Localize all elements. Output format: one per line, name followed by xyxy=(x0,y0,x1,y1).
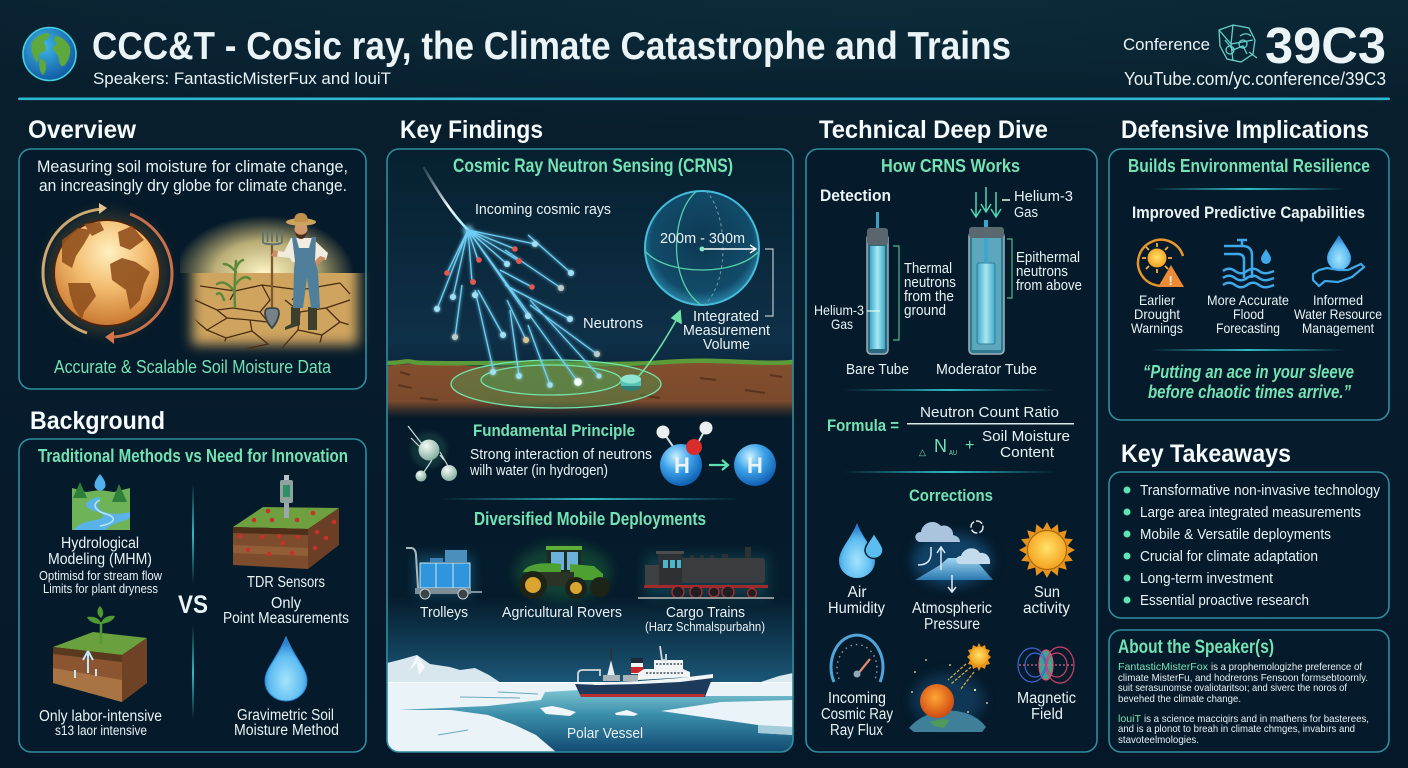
sphere: measurement volume xyxy=(645,191,773,316)
icon: neutron particles xyxy=(408,426,457,482)
bio: louiT: stavoteelmologies. xyxy=(1118,734,1199,746)
formula: N xyxy=(934,436,947,456)
icon: atmospheric pressure xyxy=(912,521,993,592)
subheading: predictive capabilities: Improved Predictive Capabilities xyxy=(1132,203,1365,222)
text: labor intensive xyxy=(39,708,162,738)
label: helium gas top: Gas xyxy=(1014,205,1038,221)
icon: humidity drops xyxy=(839,523,883,578)
label: measurement volume: Measurement xyxy=(683,323,770,339)
heading: Background: Background xyxy=(30,407,165,435)
label: helium gas top xyxy=(1014,189,1073,221)
label: epithermal neutrons xyxy=(1016,250,1082,294)
text: fundamental principle xyxy=(469,421,652,479)
bio: louiT xyxy=(1118,713,1369,746)
panel: background xyxy=(19,439,366,752)
icon: drought warning xyxy=(1138,240,1184,288)
arrow: sensor to volume xyxy=(638,311,681,377)
formula: Soil Moisture xyxy=(982,428,1070,445)
bio: FantasticMisterFox: climate MisterFu, and hodrerons Fensoon formsebtoornly. xyxy=(1118,672,1368,684)
icon: magnetic field xyxy=(1018,647,1074,683)
takeaway list: Essential proactive research xyxy=(1140,592,1309,609)
icon: incoming arrows xyxy=(971,187,1010,217)
takeaway list: Long-term investment xyxy=(1140,570,1274,587)
labels: predictive items: Informed xyxy=(1313,292,1363,308)
panel: key findings xyxy=(387,149,793,753)
diagram: moderator tube xyxy=(969,220,1012,354)
detection footprint ellipses xyxy=(451,360,661,408)
panel: defensive implications xyxy=(1109,149,1389,420)
text: TDR sensors: TDR Sensors xyxy=(247,574,325,591)
bio: FantasticMisterFox xyxy=(1118,661,1368,705)
deployment labels: Trolleys xyxy=(420,604,468,621)
label: polar vessel: Polar Vessel xyxy=(567,725,643,742)
bio: louiT: louiT xyxy=(1118,713,1142,725)
icon: water molecule to hydrogen: H xyxy=(747,453,763,478)
text: fundamental principle: wilh water (in hydrogen) xyxy=(469,463,608,479)
label: incoming flux: Incoming xyxy=(828,690,886,707)
polar scene xyxy=(387,655,793,753)
icon: water drop xyxy=(265,637,307,701)
deployment labels xyxy=(420,604,765,634)
bio: FantasticMisterFox: suit serasunomse ovaliotaritsoı; and siverc the noros of xyxy=(1118,682,1347,694)
label: epithermal neutrons: neutrons xyxy=(1016,264,1068,280)
label: air humidity: Humidity xyxy=(828,600,885,617)
takeaway list xyxy=(1140,482,1380,609)
formula: + xyxy=(965,437,974,454)
bio: FantasticMisterFox: is a prophemologizhe preference of xyxy=(1211,661,1362,673)
text: TDR sensors xyxy=(223,574,349,627)
tube captions: Moderator Tube xyxy=(936,361,1037,378)
label: magnetic field: Field xyxy=(1031,706,1063,723)
label: sun activity: Sun xyxy=(1034,584,1060,601)
panel: overview xyxy=(19,149,366,389)
icon: 39C3 logo mark xyxy=(1219,25,1257,62)
icon: water molecule to hydrogen: H xyxy=(674,453,690,478)
label: thermal neutrons: ground xyxy=(904,303,946,319)
icon: trolley xyxy=(406,548,482,599)
heading: key takeaways: Key Takeaways xyxy=(1121,440,1291,468)
subheading: Builds Environmental Resilience xyxy=(1128,156,1370,176)
icon: flood faucet xyxy=(1223,240,1274,287)
label: neutrons: Neutrons xyxy=(583,316,643,332)
labels: predictive items: Earlier xyxy=(1139,292,1175,308)
label: measurement volume xyxy=(683,309,770,353)
icon: TDR sensor soil block xyxy=(233,475,339,569)
overview text: an increasingly dry globe for climate change. xyxy=(39,177,347,195)
overview text: Measuring soil moisture for climate change, xyxy=(37,158,348,176)
icon: drying globe with arrows xyxy=(43,203,172,344)
text: TDR sensors: Only xyxy=(271,595,301,612)
deployment labels: Agricultural Rovers xyxy=(502,604,622,621)
icon: water molecule to hydrogen: H xyxy=(702,424,708,433)
label: helium gas side: Gas xyxy=(831,316,853,332)
icon: soil block with plant xyxy=(53,606,147,702)
text: fundamental principle: Fundamental Principle xyxy=(473,421,635,440)
bio: louiT: is a science macciqirs and in mathens for basterees, xyxy=(1144,713,1369,725)
takeaway list: Crucial for climate adaptation xyxy=(1140,548,1318,565)
labels: predictive items: Drought xyxy=(1134,306,1180,322)
text: fundamental principle: Strong interaction of neutrons xyxy=(470,447,652,463)
sensor xyxy=(621,374,641,391)
conference label: Conference xyxy=(1123,35,1210,54)
labels: predictive items: Management xyxy=(1302,320,1374,336)
label: atmospheric pressure xyxy=(912,600,992,633)
icon: water molecule to hydrogen: H xyxy=(660,428,666,437)
quote: before chaotic times arrive.” xyxy=(1148,382,1351,402)
takeaway list: Transformative non-invasive technology xyxy=(1140,482,1380,499)
heading: technical deep dive: Technical Deep Dive xyxy=(819,116,1048,144)
text: labor intensive: s13 laor intensive xyxy=(55,723,147,738)
icon: hydrological landscape xyxy=(72,474,130,530)
label: sun activity xyxy=(1023,584,1070,617)
label: thermal neutrons: Thermal xyxy=(904,261,952,277)
text: labor intensive: Only labor-intensive xyxy=(39,708,162,725)
icon: water molecule to hydrogen xyxy=(656,422,776,486)
panel: technical deep dive xyxy=(806,149,1097,752)
speakers line: Speakers: FantasticMisterFux and louiT xyxy=(93,69,391,88)
farmer xyxy=(271,213,328,330)
heading: Key Findings: Key Findings xyxy=(400,116,543,144)
illustration: farmer on cracked ground xyxy=(174,204,360,350)
labels: predictive items: Flood xyxy=(1233,306,1264,322)
labels: predictive items: Warnings xyxy=(1131,320,1183,336)
labels: predictive items: More Accurate xyxy=(1207,292,1289,308)
label: atmospheric pressure: Atmospheric xyxy=(912,600,992,617)
subheading: corrections: Corrections xyxy=(909,486,993,505)
diagram: bare tube xyxy=(867,212,899,354)
icon: sun xyxy=(1019,522,1075,578)
icon: flux gauge xyxy=(831,635,883,682)
labels: predictive items xyxy=(1131,292,1382,336)
panel: about the speakers xyxy=(1109,630,1389,752)
label: detection: Detection xyxy=(820,187,891,205)
label: incoming flux: Ray Flux xyxy=(830,722,883,739)
quote xyxy=(1143,362,1354,402)
icon: water management hand xyxy=(1313,235,1364,286)
formula xyxy=(827,404,1074,461)
label: helium gas side xyxy=(814,302,864,332)
ground strip xyxy=(387,361,793,418)
label: thermal neutrons: from the xyxy=(904,289,954,305)
caption: Accurate & Scalable Soil Moisture Data xyxy=(54,357,332,377)
text: TDR sensors: Point Measurements xyxy=(223,610,349,627)
panel: key takeaways xyxy=(1109,472,1389,618)
labels: predictive items: Forecasting xyxy=(1216,320,1280,336)
VS label: VS xyxy=(178,591,208,619)
text: hydrological modeling: Modeling (MHM) xyxy=(48,551,152,568)
label: magnetic field xyxy=(1017,690,1076,723)
39C3 logo text: 39C3 xyxy=(1265,17,1386,74)
formula: AU xyxy=(949,450,957,457)
takeaway list: Large area integrated measurements xyxy=(1140,504,1361,521)
pitchfork with shovel xyxy=(263,230,282,328)
label: air humidity xyxy=(828,584,885,617)
text: hydrological modeling xyxy=(39,535,163,596)
label: incoming flux: Cosmic Ray xyxy=(821,706,893,723)
label: thermal neutrons: neutrons xyxy=(904,275,956,291)
label: sun activity: activity xyxy=(1023,600,1070,617)
tube captions: Bare Tube xyxy=(846,361,909,378)
icon: sun and earth xyxy=(909,643,991,732)
label: helium gas top: Helium-3 xyxy=(1014,189,1073,205)
quote: “Putting an ace in your sleeve xyxy=(1143,362,1354,382)
label: measurement volume: Integrated xyxy=(693,309,759,325)
icon: polar vessel xyxy=(575,646,713,697)
url: YouTube.com/yc.conference/39C3 xyxy=(1124,69,1386,89)
icon: earth globe xyxy=(23,28,76,80)
heading: About the Speaker(s) xyxy=(1118,637,1274,658)
icon: cargo train xyxy=(638,547,774,599)
label: air humidity: Air xyxy=(848,584,866,601)
deployment labels: (Harz Schmalspurbahn) xyxy=(645,620,765,634)
plant xyxy=(217,260,250,307)
formula: △ xyxy=(919,447,926,457)
heading: mobile deployments: Diversified Mobile Deployments xyxy=(474,509,706,529)
label: magnetic field: Magnetic xyxy=(1017,690,1076,707)
heading: Overview: Overview xyxy=(28,116,137,144)
label: helium gas side: Helium-3 xyxy=(814,302,864,318)
overview text xyxy=(37,158,348,195)
text: gravimetric method xyxy=(234,707,339,739)
label: atmospheric pressure: Pressure xyxy=(924,616,980,633)
icon: drought warning: ! xyxy=(1168,273,1173,288)
text: gravimetric method: Moisture Method xyxy=(234,722,339,739)
takeaway list: Mobile & Versatile deployments xyxy=(1140,526,1331,543)
formula: Formula = xyxy=(827,416,899,435)
text: gravimetric method: Gravimetric Soil xyxy=(237,707,334,724)
sphere: measurement volume: 200m - 300m xyxy=(660,231,745,247)
subheading: How CRNS Works xyxy=(881,156,1020,176)
formula: Content xyxy=(1000,444,1055,461)
heading: defensive implications: Defensive Implications xyxy=(1121,116,1369,144)
title: CCC&T - Cosic ray, the Climate Catastrophe and Trains xyxy=(92,25,1011,68)
label: incoming flux xyxy=(821,690,893,739)
label: incoming rays: Incoming cosmic rays xyxy=(475,202,611,218)
label: thermal neutrons xyxy=(904,261,956,319)
text: hydrological modeling: Optimisd for stream flow xyxy=(39,569,163,583)
deployment labels: Cargo Trains xyxy=(666,604,745,621)
text: hydrological modeling: Hydrological xyxy=(61,535,139,552)
labels: predictive items: Water Resource xyxy=(1294,306,1382,322)
panel title: Traditional Methods vs Need for Innovation xyxy=(38,446,348,466)
bullets xyxy=(1124,486,1130,604)
label: epithermal neutrons: from above xyxy=(1016,278,1082,294)
panel title: Cosmic Ray Neutron Sensing (CRNS) xyxy=(453,156,733,177)
tube captions xyxy=(846,361,1037,378)
text: hydrological modeling: Limits for plant dryness xyxy=(43,582,158,596)
icon: agricultural rover tractor xyxy=(515,544,611,600)
label: measurement volume: Volume xyxy=(703,337,750,353)
diagram: cosmic ray shower xyxy=(424,168,602,388)
bio: FantasticMisterFox: bevehed the climate change. xyxy=(1118,693,1241,705)
label: epithermal neutrons: Epithermal xyxy=(1016,250,1080,266)
formula: Neutron Count Ratio xyxy=(920,404,1059,421)
bio: FantasticMisterFox: FantasticMisterFox xyxy=(1118,661,1209,673)
bio: louiT: and is a plonot to breah in climate chmges, invabırs and xyxy=(1118,723,1355,735)
header xyxy=(23,17,1386,89)
